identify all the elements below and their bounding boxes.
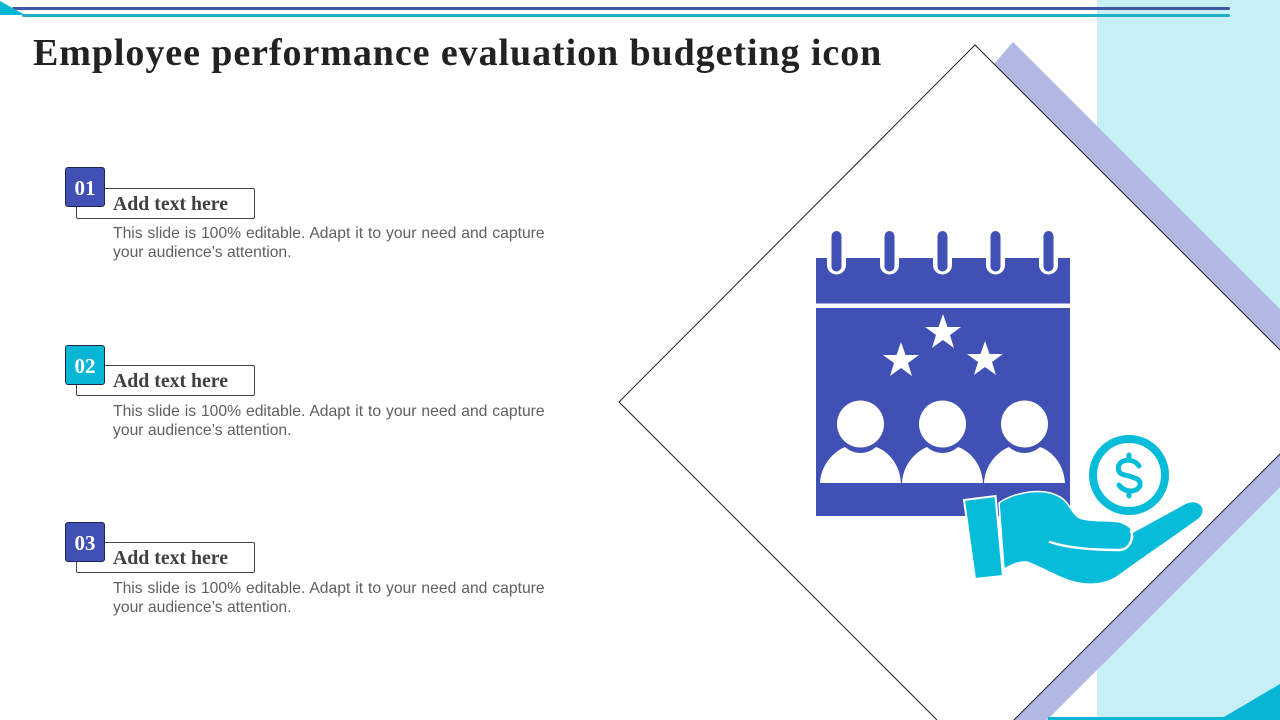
icon: hand holding coin — [964, 439, 1203, 584]
heading 01: Add text here — [113, 193, 228, 215]
description 01: your audience’s attention. — [113, 244, 292, 261]
number badge 03: 03 — [74, 531, 96, 555]
list item 03 — [65, 522, 545, 616]
number badge 01 — [65, 167, 105, 207]
description 02 — [113, 403, 545, 439]
icon: three people — [820, 400, 1065, 483]
description 03: This slide is 100% editable. Adapt it to your need and capture — [113, 580, 545, 597]
heading 03: Add text here — [113, 547, 228, 569]
label box 02 — [76, 365, 255, 396]
heading 02: Add text here — [113, 370, 228, 392]
description 02: your audience’s attention. — [113, 422, 292, 439]
icon: calendar with team, stars and money in hand — [816, 231, 1202, 584]
number badge 02 — [65, 345, 105, 385]
icon: three stars — [883, 314, 1003, 376]
icon: calendar — [816, 236, 1070, 516]
list item 01 — [65, 167, 545, 261]
label box 01 — [76, 188, 255, 219]
number badge 02: 02 — [74, 354, 96, 378]
label box 03 — [76, 542, 255, 573]
description 01: This slide is 100% editable. Adapt it to your need and capture — [113, 225, 545, 242]
description 02: This slide is 100% editable. Adapt it to your need and capture — [113, 403, 545, 420]
list item 02 — [65, 345, 545, 439]
description 03: your audience’s attention. — [113, 599, 292, 616]
description 03 — [113, 580, 545, 616]
number badge 01: 01 — [74, 176, 96, 200]
title: Employee performance evaluation budgeting icon — [33, 32, 882, 74]
number badge 03 — [65, 522, 105, 562]
description 01 — [113, 225, 545, 261]
